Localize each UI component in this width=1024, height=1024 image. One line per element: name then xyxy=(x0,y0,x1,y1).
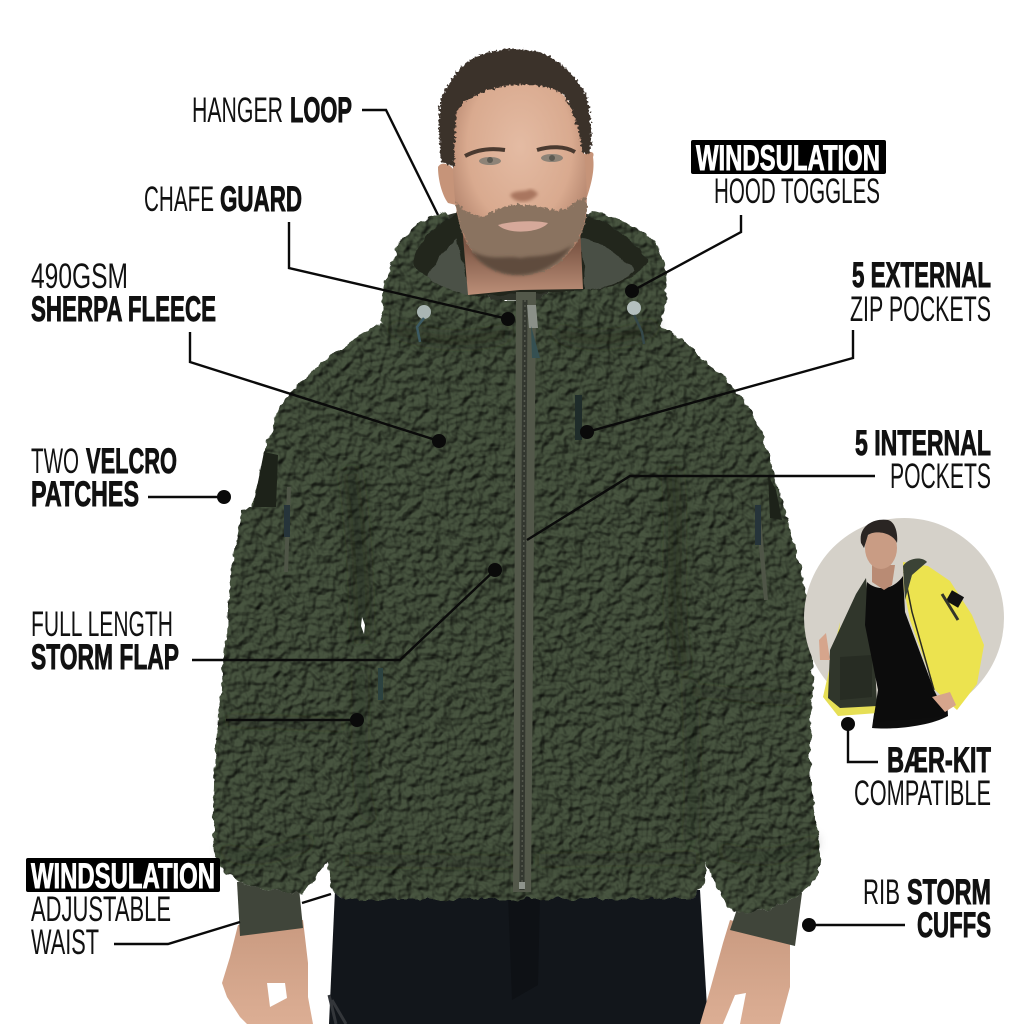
label: sherpa fleece: SHERPA FLEECE xyxy=(31,290,216,329)
leader: chafe guard xyxy=(289,222,515,326)
hood interior backing xyxy=(400,207,650,300)
head xyxy=(438,49,594,275)
centre zipper storm flap xyxy=(513,292,540,892)
label: hanger loop: LOOP xyxy=(290,91,352,130)
leader: external pockets xyxy=(580,330,853,439)
trousers xyxy=(329,890,708,1024)
label: velcro patches: VELCRO xyxy=(86,442,177,481)
label: windsulation hood toggles: WINDSULATION xyxy=(696,139,880,178)
fleece jacket body, hood and sleeves xyxy=(213,212,821,913)
leader: storm cuffs xyxy=(802,918,905,932)
label: velcro patches: TWO xyxy=(31,442,79,481)
hero photo: man wearing sherpa fleece jacket xyxy=(213,49,821,1024)
label: velcro patches: PATCHES xyxy=(31,475,139,514)
hood opening and lining xyxy=(413,210,648,296)
label: rib storm cuffs xyxy=(863,873,991,945)
inset jacket left yellow edge xyxy=(823,622,878,716)
inset head xyxy=(861,520,897,590)
leader: internal pockets xyxy=(527,476,875,540)
leader: velcro patches xyxy=(148,490,231,504)
neck xyxy=(462,225,583,295)
shading folds on jacket xyxy=(222,325,815,862)
hood toggles xyxy=(417,301,644,344)
inset circle: Baer-Kit compatible jacket xyxy=(804,518,1004,728)
leader: hood toggles xyxy=(625,215,741,298)
small gap under left arm xyxy=(361,617,365,634)
label: velcro patches xyxy=(31,442,177,514)
label: chafe guard: GUARD xyxy=(220,180,302,219)
label: storm flap xyxy=(31,605,179,677)
leader: storm flap xyxy=(192,563,502,660)
label: windsulation hood toggles: HOOD TOGGLES xyxy=(714,172,880,211)
label: rib storm cuffs: RIB xyxy=(863,873,900,912)
mouth xyxy=(498,221,548,232)
inset jacket lining xyxy=(828,578,877,708)
right hand xyxy=(700,920,790,1024)
label: windsulation adjustable waist: ADJUSTABLE xyxy=(31,890,171,929)
label: storm flap: STORM FLAP xyxy=(31,638,179,677)
label: storm flap: FULL LENGTH xyxy=(31,605,173,644)
leader lines and markers xyxy=(114,110,905,944)
leader: baer-kit xyxy=(841,717,878,762)
pocket zips and velcro patches xyxy=(253,395,782,700)
label: sherpa fleece xyxy=(31,257,216,329)
inset t-shirt xyxy=(865,576,947,722)
label: baer-kit compatible xyxy=(854,741,991,813)
inset trousers xyxy=(872,698,948,728)
nose xyxy=(510,189,538,202)
leader: adjustable waist xyxy=(114,894,331,944)
rib cuffs xyxy=(237,878,802,946)
inset yellow jacket xyxy=(903,562,984,710)
leader: sherpa fleece xyxy=(190,332,446,448)
beard xyxy=(456,198,586,275)
label: internal pockets xyxy=(855,424,991,496)
label: windsulation adjustable waist: WAIST xyxy=(31,923,99,962)
label: windsulation hood toggles xyxy=(691,139,886,211)
label: hanger loop: HANGER xyxy=(192,91,283,130)
label: windsulation adjustable waist xyxy=(26,857,220,962)
inset hands xyxy=(819,633,956,712)
eyebrows xyxy=(465,147,575,156)
label: chafe guard: CHAFE xyxy=(144,180,214,219)
left hand xyxy=(222,920,313,1024)
hair xyxy=(439,49,591,167)
eyes xyxy=(479,157,501,165)
label: external zip pockets xyxy=(850,256,991,329)
label: sherpa fleece: 490GSM xyxy=(31,257,128,296)
label: windsulation adjustable waist: WINDSULATION xyxy=(31,857,215,896)
leader: hanger loop xyxy=(362,110,438,215)
leader: sleeve pocket xyxy=(226,713,364,727)
